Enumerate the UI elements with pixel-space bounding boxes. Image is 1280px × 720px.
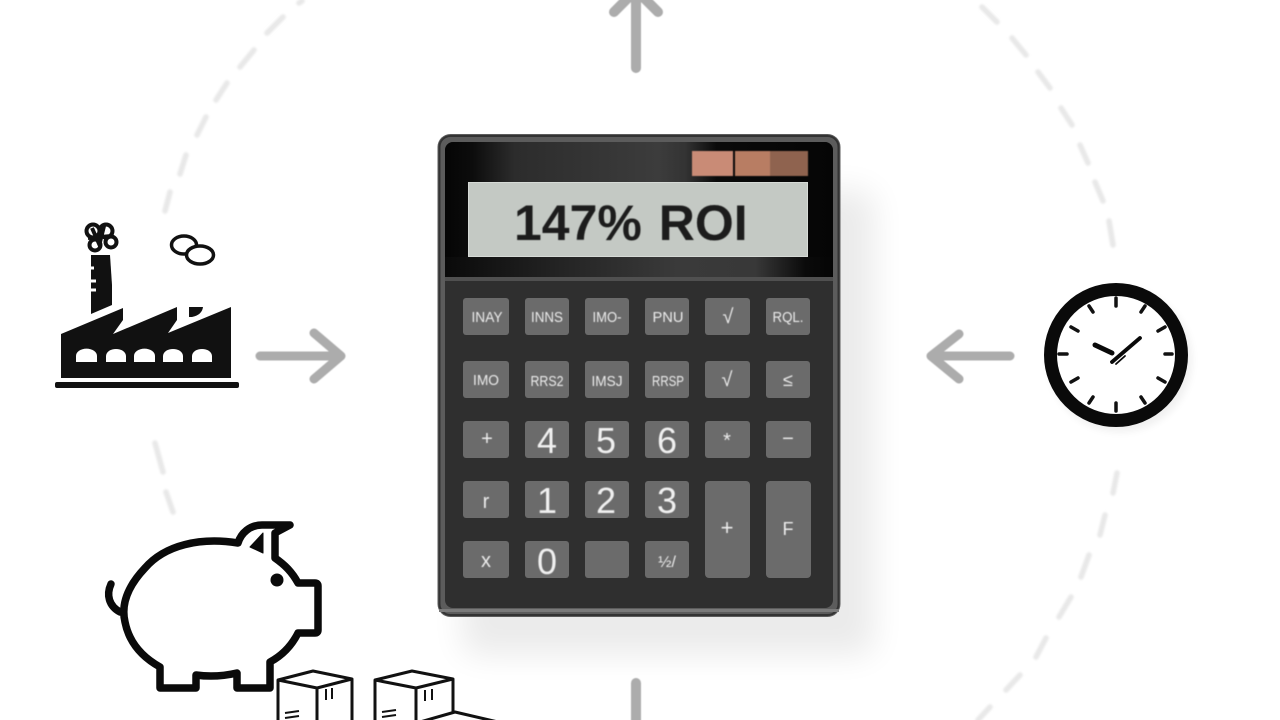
key labels: + (721, 515, 733, 540)
key labels: ≤ (783, 370, 793, 390)
icon: piggy bank (109, 525, 318, 688)
factory windows (76, 349, 212, 362)
key digits: 6 (657, 420, 677, 461)
key labels: ½/ (658, 554, 676, 571)
display readout: 147% ROI (514, 195, 748, 251)
key digits: 4 (537, 420, 557, 461)
icon: clock (1048, 288, 1192, 432)
calculator body (438, 134, 840, 617)
key labels: IMO- (592, 309, 622, 326)
key labels: RQL. (772, 309, 804, 326)
cloud (172, 236, 214, 264)
box three (420, 712, 498, 720)
icon: factory (55, 224, 239, 388)
pig eye (270, 574, 284, 586)
arrow: top (614, 0, 658, 68)
pig ear (250, 533, 263, 553)
key digits: 0 (537, 541, 557, 582)
box one (278, 671, 352, 720)
arrow: bottom (631, 683, 641, 720)
key labels: √ (723, 306, 734, 328)
display (468, 182, 808, 256)
factory ground line (55, 382, 239, 388)
solar panel (692, 151, 808, 176)
key labels: F (782, 519, 794, 539)
arrow: from factory (260, 333, 341, 379)
clock hands (1095, 338, 1140, 364)
key digits: 3 (657, 480, 677, 521)
key labels (472, 306, 804, 572)
key labels: INAY (472, 309, 502, 326)
calculator (438, 134, 874, 655)
key digits: 1 (537, 480, 557, 521)
key labels: √ (722, 369, 733, 391)
key labels: − (782, 428, 794, 450)
key labels: * (723, 430, 731, 452)
key labels: r (483, 491, 490, 513)
key labels: INNS (531, 309, 563, 326)
key labels: + (481, 428, 493, 450)
clock ticks (1059, 298, 1172, 411)
key labels: RRSP (652, 373, 684, 390)
arrow: from clock (931, 334, 1010, 379)
key digits: 5 (596, 420, 616, 461)
smoke (86, 224, 116, 250)
keypad (463, 298, 811, 578)
key labels: RRS2 (530, 373, 564, 390)
key labels: IMO (473, 372, 499, 389)
box two (375, 671, 453, 720)
dashed orbit circle (155, 1, 1117, 720)
key labels: IMSJ (592, 373, 622, 390)
key digits: 2 (596, 480, 616, 521)
chimney (91, 255, 112, 314)
key digits (537, 420, 677, 582)
factory building (61, 307, 231, 378)
icon: boxes (278, 671, 498, 720)
key labels: PNU (652, 309, 684, 326)
key labels: x (481, 550, 491, 572)
